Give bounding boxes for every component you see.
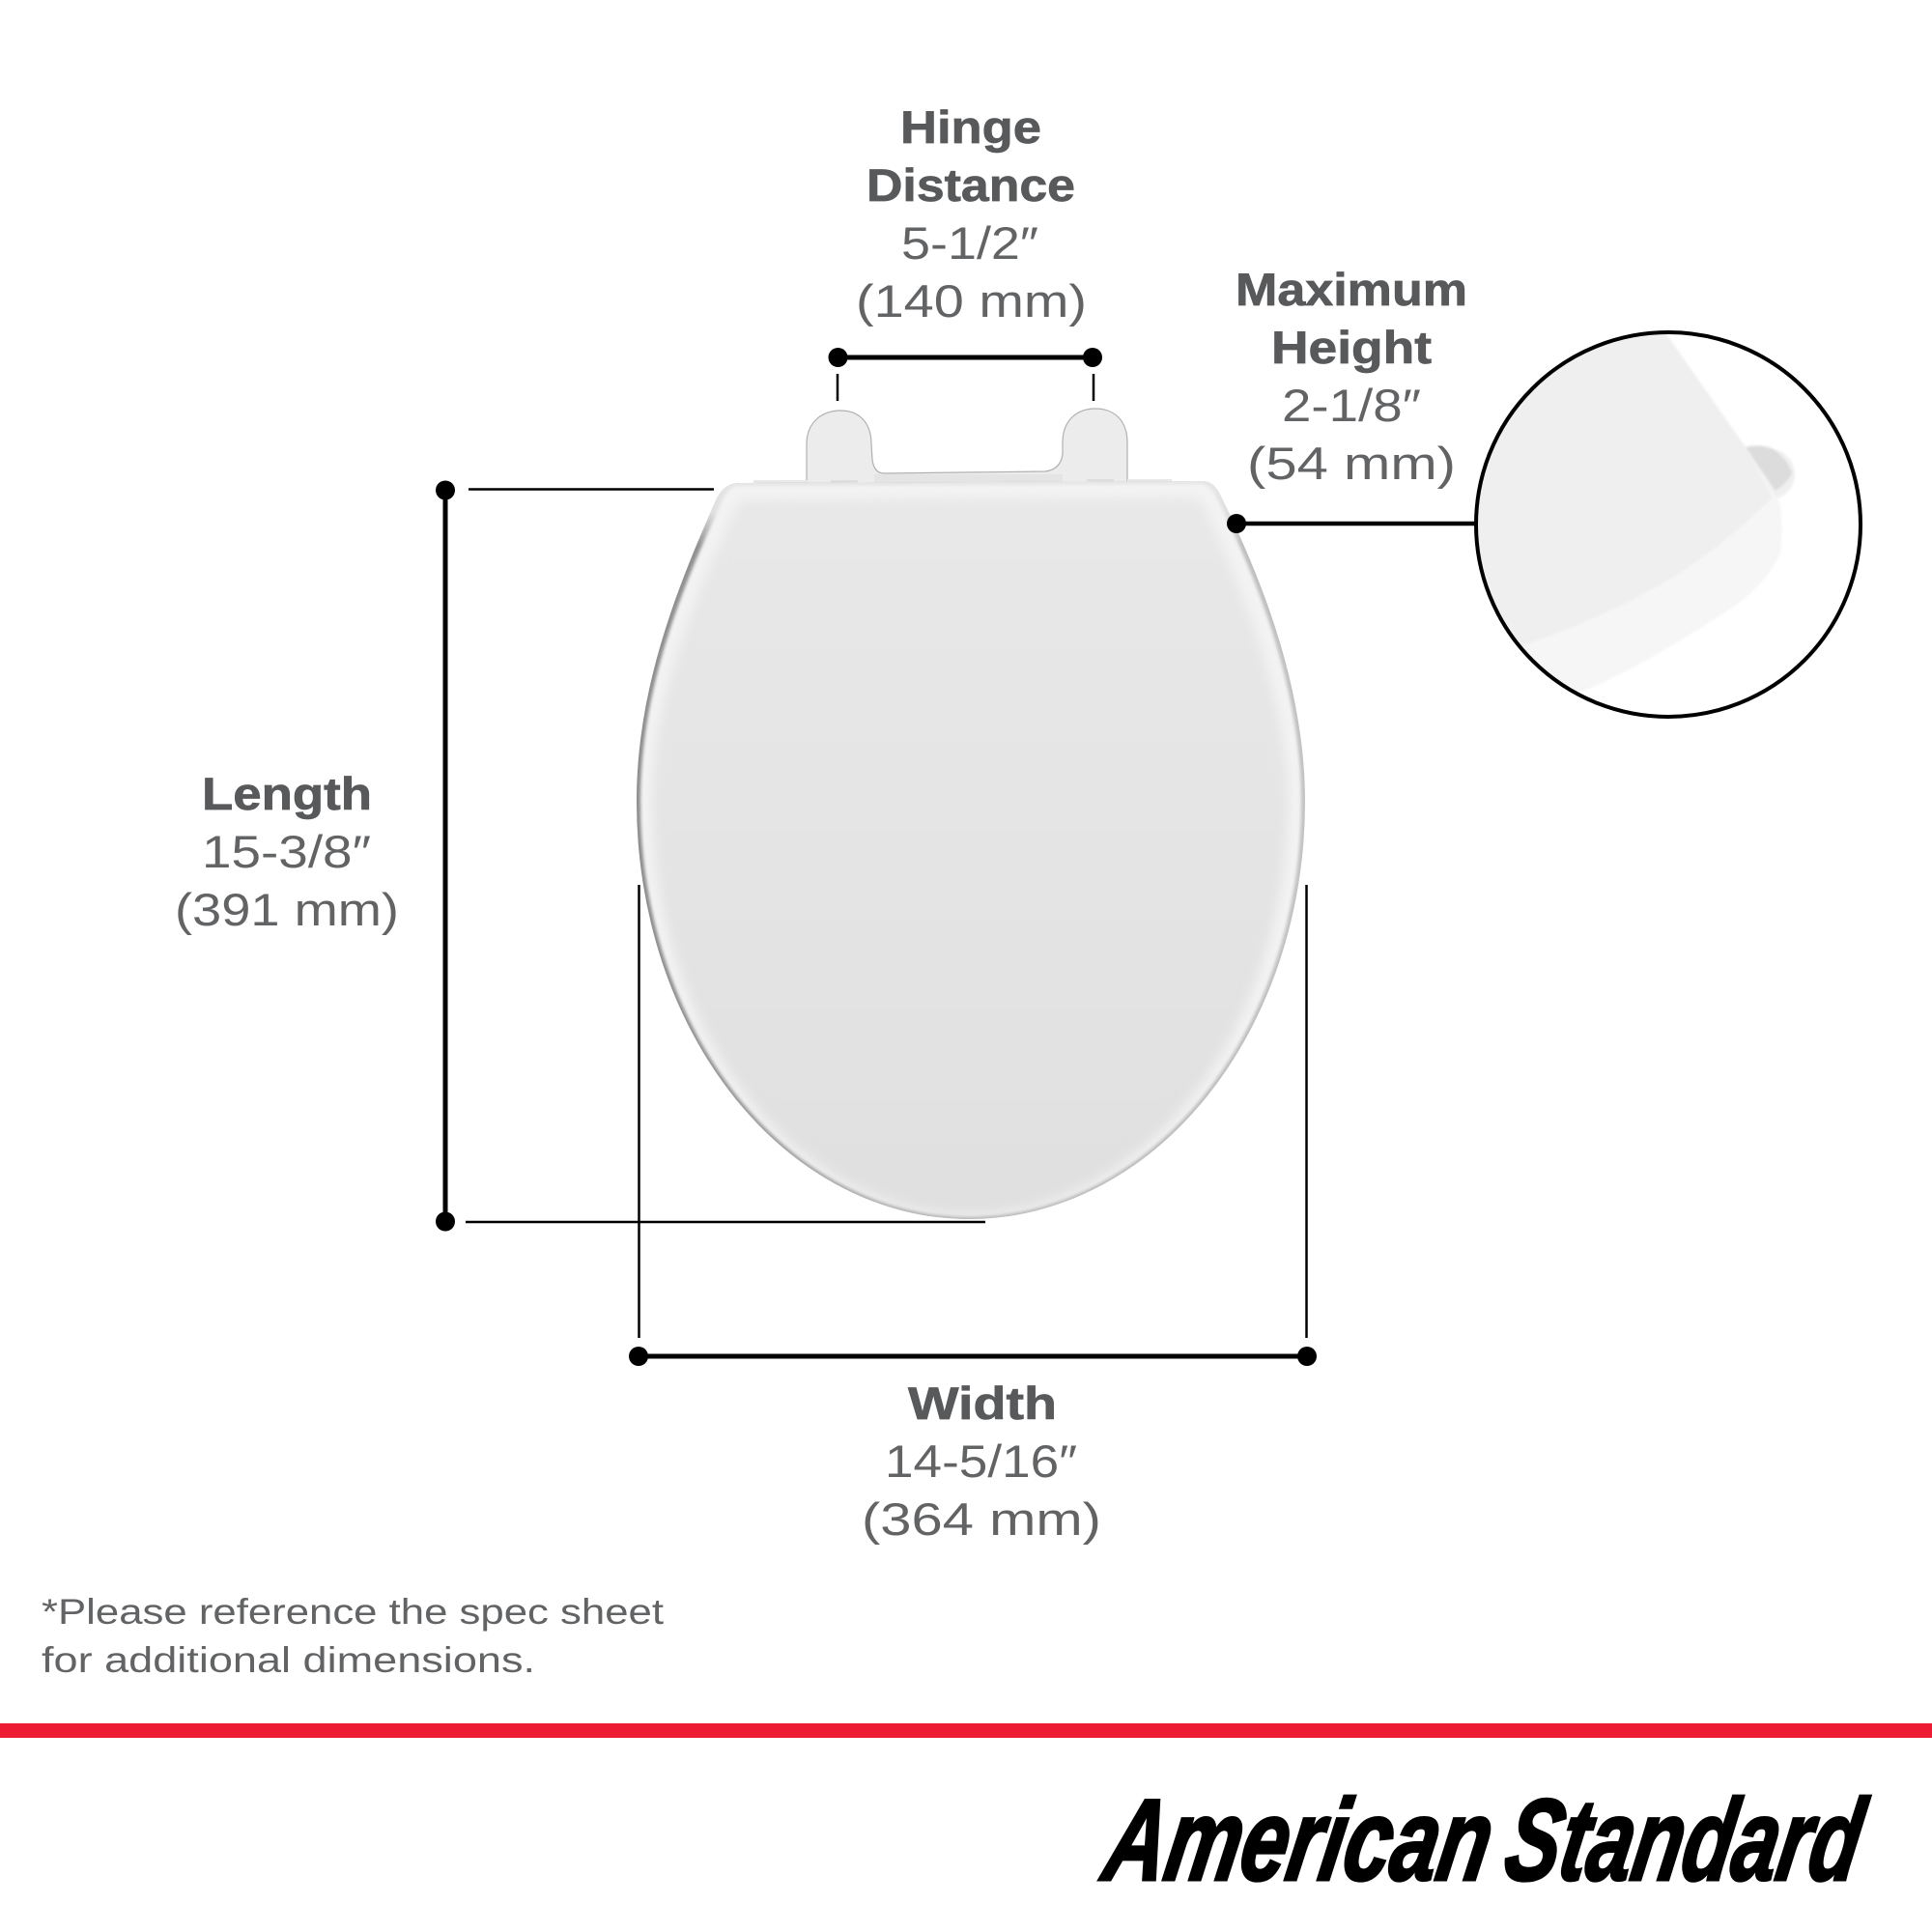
label: width: Width (908, 1378, 1057, 1429)
label: hinge distance: (140 mm) (856, 275, 1087, 327)
label: length: 15-3/8″ (202, 826, 371, 877)
label: width (862, 1378, 1101, 1545)
footnote: for additional dimensions. (42, 1640, 535, 1680)
label: hinge distance: Distance (867, 159, 1075, 211)
label: length (175, 768, 399, 935)
label: maximum height: Height (1271, 322, 1432, 373)
dimension: width line (629, 885, 1317, 1366)
dimension: hinge distance line (829, 348, 1102, 401)
label: width: 14-5/16″ (885, 1435, 1077, 1487)
label: maximum height: (54 mm) (1247, 438, 1456, 489)
label: hinge distance: Hinge (900, 101, 1041, 153)
seat lid (628, 478, 1314, 1219)
red divider bar (0, 1723, 1932, 1738)
dimension: length line (436, 481, 985, 1231)
label: length: (391 mm) (175, 884, 399, 935)
label: maximum height (1236, 264, 1467, 489)
footnote (42, 1592, 665, 1680)
illustration: toilet seat (628, 409, 1314, 1219)
label: width: (364 mm) (862, 1493, 1101, 1545)
label: hinge distance: 5-1/2″ (901, 217, 1038, 269)
hinge tabs (753, 409, 1172, 488)
logo: American Standard: American (1094, 1776, 1503, 1905)
label: maximum height: 2-1/8″ (1282, 380, 1421, 431)
label: hinge distance (856, 101, 1087, 327)
footnote: *Please reference the spec sheet (42, 1592, 665, 1632)
callout: maximum height detail circle (1227, 309, 1861, 734)
label: length: Length (202, 768, 372, 819)
label: maximum height: Maximum (1236, 264, 1467, 315)
